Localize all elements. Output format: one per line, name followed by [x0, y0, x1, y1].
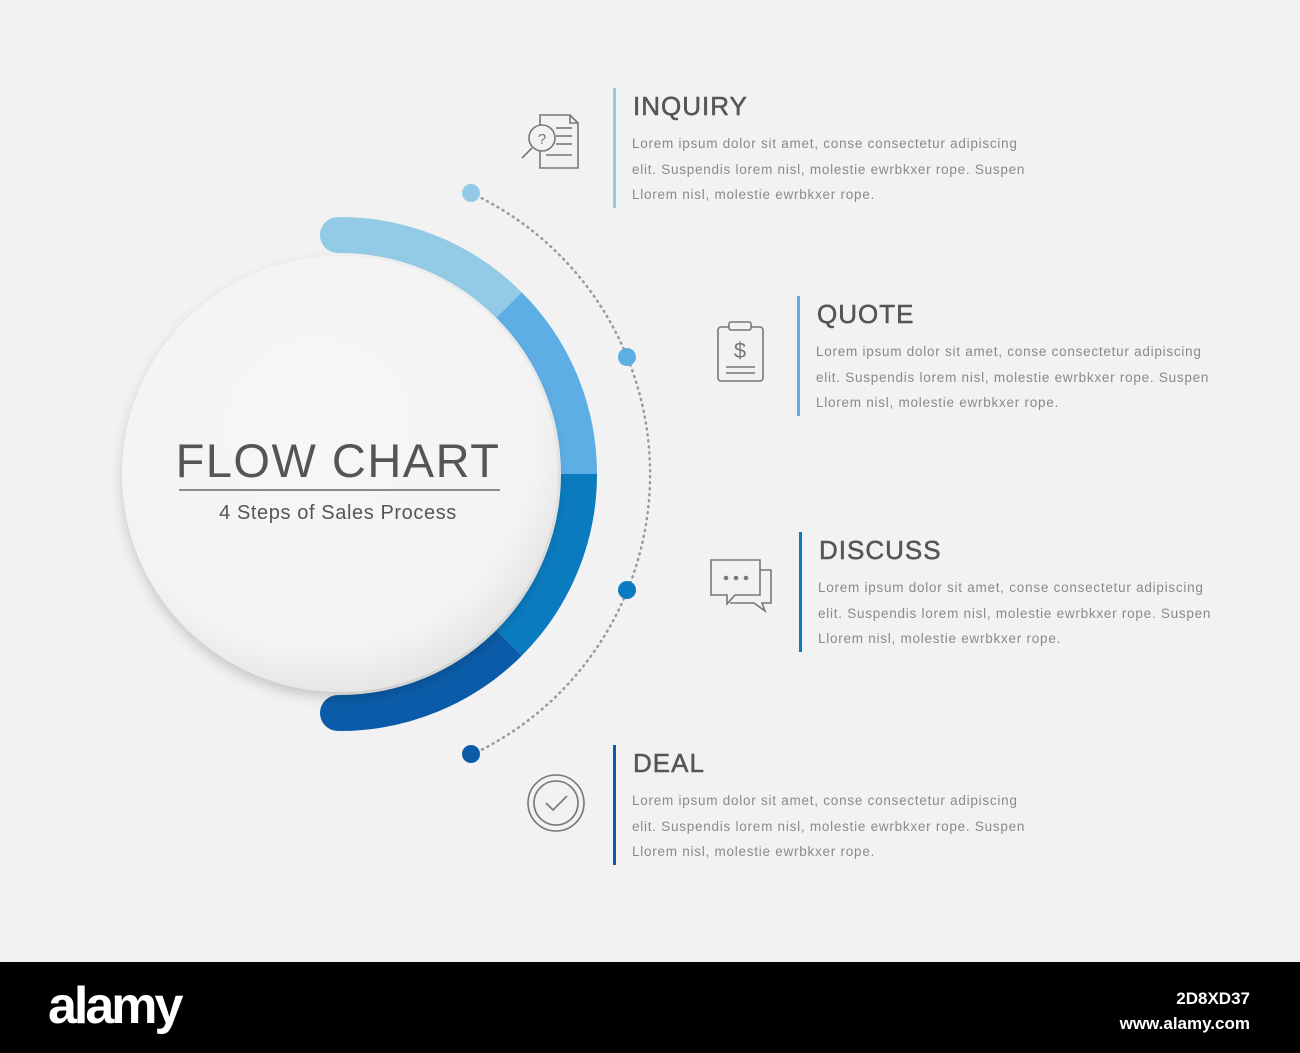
step: discuss: elit. Suspendis lorem nisl, molestie ewrbkxer rope. Suspen: [818, 606, 1211, 620]
icon: quote: [718, 322, 763, 381]
icon: discuss: [711, 560, 771, 611]
footer ids: 2D8XD37: [1176, 989, 1250, 1008]
step: deal: elit. Suspendis lorem nisl, molestie ewrbkxer rope. Suspen: [632, 818, 1025, 834]
step: deal: Llorem nisl, molestie ewrbkxer rope.: [632, 844, 875, 859]
step: inquiry: INQUIRY: [633, 91, 748, 121]
step: deal: DEAL: [633, 748, 705, 778]
step: quote: Lorem ipsum dolor sit amet, conse consectetur adipiscing: [816, 344, 1202, 359]
footer bar: [0, 962, 1300, 1053]
dotted arc: [471, 193, 650, 755]
step: discuss: [799, 532, 1211, 652]
step: discuss: DISCUSS: [819, 535, 942, 565]
icon: deal: [528, 775, 584, 831]
step: deal: Lorem ipsum dolor sit amet, conse consectetur adipiscing: [632, 793, 1018, 808]
step: inquiry: Lorem ipsum dolor sit amet, conse consectetur adipiscing: [632, 136, 1018, 151]
dots: [462, 184, 480, 202]
step: quote: elit. Suspendis lorem nisl, molestie ewrbkxer rope. Suspen: [816, 370, 1209, 384]
step: quote: [797, 296, 1209, 416]
step: discuss: Llorem nisl, molestie ewrbkxer rope.: [818, 631, 1061, 646]
step: inquiry: Llorem nisl, molestie ewrbkxer rope.: [632, 187, 875, 202]
footer ids: www.alamy.com: [1120, 1014, 1250, 1033]
step: deal: [613, 745, 1025, 865]
step: quote: QUOTE: [817, 299, 914, 329]
white center circle: [122, 256, 558, 692]
step: quote: Llorem nisl, molestie ewrbkxer rope.: [816, 395, 1059, 410]
diagram graphics: 4 Steps of Sales Process: [219, 502, 457, 524]
icon: inquiry: ?: [538, 131, 546, 148]
footer logo: alamy: [48, 977, 180, 1035]
step: inquiry: [613, 88, 1025, 208]
icon: inquiry: [522, 115, 578, 168]
title: FLOW CHART: [176, 434, 500, 487]
icon: quote: $: [734, 338, 746, 363]
step: discuss: Lorem ipsum dolor sit amet, conse consectetur adipiscing: [818, 580, 1204, 595]
footer ids: [1120, 989, 1250, 1033]
colored arc segments: [340, 235, 579, 713]
step: inquiry: elit. Suspendis lorem nisl, molestie ewrbkxer rope. Suspen: [632, 162, 1025, 176]
